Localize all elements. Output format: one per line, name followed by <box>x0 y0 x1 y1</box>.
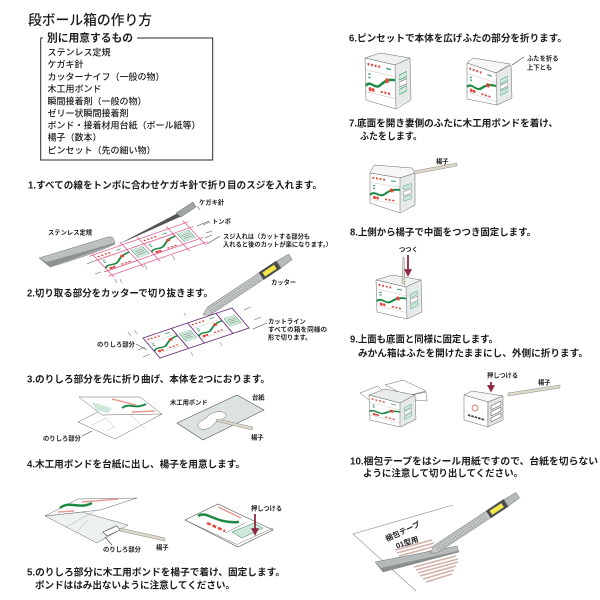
step 1 heading: 1.すべての線をトンボに合わせケガキ針で折り目のスジを入れます。 <box>28 178 322 192</box>
box side <box>406 280 422 319</box>
label: fold lid: ふたを折る <box>527 54 558 62</box>
toothpick <box>414 163 457 174</box>
tape label: 梱包テープ <box>384 519 422 543</box>
step 3 illustration: folded net <box>43 397 162 442</box>
materials items: 木工用ボンド <box>48 83 102 94</box>
leader: glue tab <box>82 431 92 436</box>
step 7 heading line 2: ふたをします。 <box>360 130 422 142</box>
leader lines <box>136 323 267 350</box>
lid <box>467 58 510 73</box>
step 3 illustration: glue on card <box>170 392 265 442</box>
step 4 heading: 4.木工用ボンドを台紙に出し、楊子を用意します。 <box>27 458 245 470</box>
lower white panel <box>78 410 162 439</box>
box side <box>488 396 503 427</box>
step 7 heading: 7.底面を開き妻側のふたに木工用ボンドを着け、 <box>349 116 558 130</box>
lid <box>370 165 415 178</box>
label: toothpick: 楊子 <box>156 542 169 552</box>
cutter knife <box>428 491 520 557</box>
label: cut line: カットライン <box>268 318 306 326</box>
label: scribe: ケガキ針 <box>199 198 225 206</box>
step 8 illustration: poke from above <box>376 246 422 319</box>
box front <box>467 63 496 109</box>
glue tab <box>103 526 120 536</box>
materials items: 楊子（数本） <box>48 132 102 142</box>
step 5 heading: 5.のりしろ部分に木工用ボンドを楊子で着け、固定します。 <box>27 566 285 578</box>
label: top and bottom: 上下とも <box>527 62 552 72</box>
wood glue puddle <box>198 412 226 429</box>
box face mark <box>472 405 478 411</box>
label: card: 台紙 <box>252 392 265 402</box>
upper printed flap <box>45 498 137 516</box>
step 5 illustration: gluing the tab <box>45 498 169 554</box>
step 6 heading: 6.ピンセットで本体を広げふたの部分を折ります。 <box>349 32 567 44</box>
step 9 heading: 9.上面も底面と同様に固定します。 <box>350 332 498 346</box>
leader lines <box>197 221 220 244</box>
materials items: ピンセット（先の細い物） <box>48 144 156 156</box>
upper printed flap <box>79 397 162 415</box>
arrow: press <box>252 514 258 534</box>
label: score note: スジ入れは（カットする部分も <box>223 232 310 240</box>
materials items: ボンド・接着材用台紙（ボール紙等） <box>48 120 201 130</box>
step 2 heading: 2.切り取る部分をカッターで切り抜きます。 <box>27 286 213 300</box>
label: score note line 2: 入れると後のカットが楽になります。） <box>223 240 332 248</box>
step 6 illustration: open box <box>365 53 411 109</box>
step 10 heading line 2: ように注意して切り出してください。 <box>363 466 523 480</box>
scribing needle <box>117 213 182 245</box>
arrow: poke <box>406 255 410 275</box>
label: glue tab: のりしろ部分 <box>43 434 81 442</box>
label: cut line note 2: 形で切ります。 <box>268 332 311 342</box>
materials items: ステンレス定規 <box>48 46 111 58</box>
packing tape strips <box>395 540 458 582</box>
step 8 heading: 8.上側から楊子で中面をつつき固定します。 <box>350 226 536 238</box>
label: wood glue: 木工用ボンド <box>170 398 208 406</box>
printed panel <box>198 514 239 522</box>
inner back <box>369 389 415 403</box>
materials items: 瞬間接着剤（一般の物） <box>48 96 147 106</box>
step 2 illustration: cutting the net <box>97 253 327 358</box>
label: poke: つつく <box>399 246 418 254</box>
box front <box>369 395 401 428</box>
step 1 illustration: scoring the net <box>39 198 332 283</box>
toothpick <box>402 257 405 285</box>
box front <box>365 58 396 107</box>
leader <box>512 57 524 65</box>
box top <box>464 391 503 402</box>
backing card <box>177 395 264 440</box>
step 6 illustration: folded lid box <box>467 54 558 109</box>
box face <box>464 395 488 427</box>
title: 段ボール箱の作り方 <box>28 12 152 28</box>
crop marks <box>87 206 212 283</box>
box side <box>496 65 512 106</box>
toothpick <box>216 419 253 430</box>
box side <box>400 173 415 211</box>
label: toothpick: 楊子 <box>436 156 449 166</box>
step 9 heading line 2: みかん箱はふたを開けたままにし、外側に折ります。 <box>358 346 588 360</box>
box front <box>376 280 407 319</box>
box front <box>370 173 400 211</box>
label: glue tab: のりしろ部分 <box>97 340 135 348</box>
label: crop mark: トンボ <box>212 216 232 226</box>
step 9 illustration: closed box top <box>464 370 560 427</box>
tape size label: 01型用 <box>394 534 420 550</box>
step 3 heading: 3.のりしろ部分を先に折り曲げ、本体を2つにおります。 <box>27 372 270 386</box>
box side <box>400 395 416 428</box>
toothpick <box>508 385 560 396</box>
arrow: press <box>488 382 494 390</box>
step 7 illustration: gluing bottom <box>370 156 457 213</box>
label: ruler: ステンレス定規 <box>48 228 93 236</box>
box back <box>376 275 421 287</box>
net with purple cut line <box>143 308 249 358</box>
materials items: ゼリー状瞬間接着剤 <box>48 108 129 118</box>
materials heading: 別に用意するもの <box>47 32 133 44</box>
panel: materials list <box>41 32 213 160</box>
step 9 illustration: open-flap box <box>360 380 427 428</box>
materials items <box>48 46 201 156</box>
label: glue tab: のりしろ部分 <box>103 544 141 554</box>
lower panel <box>45 512 128 543</box>
toothpick <box>120 528 165 541</box>
printed net with pink lines <box>87 219 210 279</box>
materials items: ケガキ針 <box>48 58 84 70</box>
step 10 illustration: cutting packing tape <box>353 491 520 591</box>
cutter knife <box>201 253 293 319</box>
label: cut line note: すべての箱を同様の <box>268 324 327 334</box>
box back <box>365 53 410 65</box>
step 5 illustration: pressing flat <box>185 504 282 547</box>
step 10 heading: 10.梱包テープをはシール用紙ですので、台紙を切らない <box>350 454 598 468</box>
crop marks <box>128 307 261 357</box>
label: cutter: カッター <box>271 278 296 286</box>
materials items: カッターナイフ（一般の物） <box>48 71 165 82</box>
step 5 heading line 2: ボンドははみ出ないように注意してください。 <box>35 578 235 592</box>
ruler <box>375 546 459 572</box>
leader <box>105 537 112 545</box>
label: toothpick: 楊子 <box>251 432 264 442</box>
stainless ruler <box>39 237 115 267</box>
box side <box>395 58 411 107</box>
label: toothpick: 楊子 <box>538 378 551 386</box>
label: press: 押しつける <box>251 504 282 512</box>
backing sheet edges <box>353 505 453 591</box>
outer flaps <box>360 380 427 401</box>
label: press: 押しつける <box>487 370 518 380</box>
card stack <box>185 504 273 547</box>
